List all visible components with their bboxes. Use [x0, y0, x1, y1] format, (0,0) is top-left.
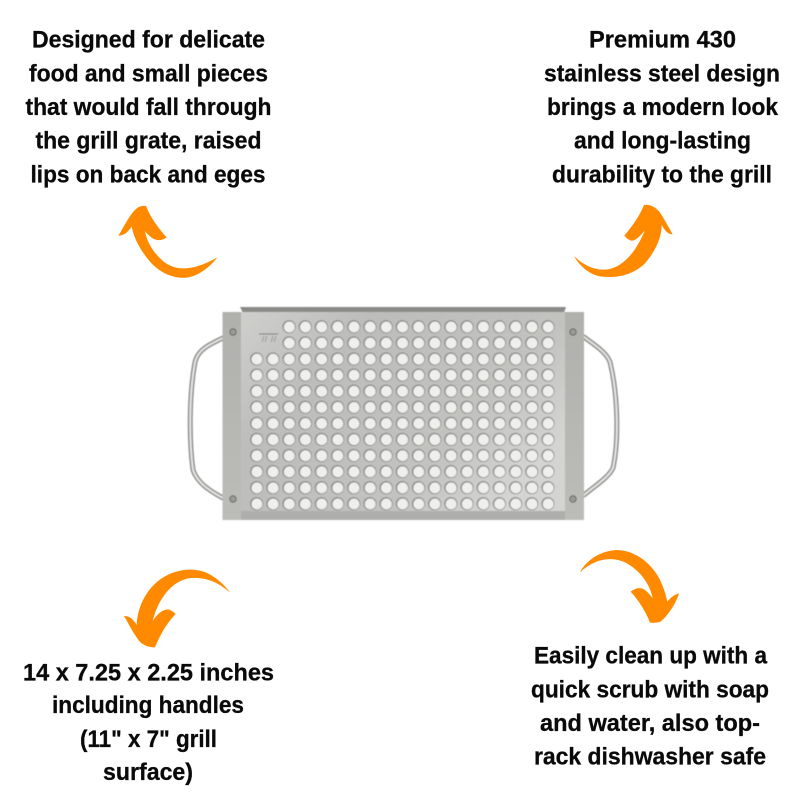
- text: bottom-right cleaning: and water, also top-: [540, 710, 760, 737]
- front edge band: [241, 511, 565, 520]
- product: stainless steel grill topper: [190, 307, 617, 520]
- text: top-right feature: Premium 430: [589, 26, 736, 54]
- text: top-left feature: that would fall through: [26, 94, 272, 121]
- text: bottom-right cleaning: quick scrub with soap: [531, 676, 769, 704]
- main plate: [241, 312, 565, 520]
- left flange: [222, 312, 241, 520]
- text: top-left feature: the grill grate, raised: [36, 128, 262, 154]
- text: bottom-left dimensions: [23, 660, 274, 786]
- left handle: [190, 338, 223, 498]
- text: top-left feature: food and small pieces: [29, 60, 268, 88]
- perforated holes, lower rows: [249, 351, 556, 512]
- arrow: bottom-right, pointing down: [580, 550, 679, 623]
- rivet: bottom-right: [570, 496, 576, 502]
- text: top-right feature: and long-lasting: [574, 128, 751, 154]
- text: bottom-left dimensions: (11" x 7" grill: [80, 726, 217, 753]
- text: top-right feature: [544, 26, 780, 188]
- top lip: [240, 307, 566, 313]
- right handle: [584, 337, 617, 495]
- arrow: bottom-left, pointing down: [124, 570, 230, 647]
- arrow: top-left, pointing up: [118, 206, 217, 278]
- text: top-left feature: lips on back and eges: [30, 162, 266, 188]
- text: top-left feature: [26, 26, 272, 188]
- text: bottom-left dimensions: surface): [103, 759, 193, 786]
- rivet: top-right: [570, 329, 576, 335]
- logo mark: [259, 334, 278, 342]
- text: bottom-right cleaning: Easily clean up with a: [534, 642, 768, 670]
- text: bottom-right cleaning: rack dishwasher safe: [534, 744, 766, 770]
- text: bottom-left dimensions: including handles: [52, 692, 244, 719]
- text: top-right feature: durability to the grill: [552, 162, 772, 188]
- perforated holes, top rows beside logo: [281, 319, 556, 351]
- text: top-left feature: Designed for delicate: [32, 26, 265, 54]
- text: top-right feature: brings a modern look: [547, 94, 779, 121]
- text: top-right feature: stainless steel design: [544, 60, 780, 88]
- rivet: bottom-left: [230, 496, 236, 502]
- right flange: [565, 312, 584, 520]
- text: bottom-left dimensions: 14 x 7.25 x 2.25 inches: [23, 660, 274, 686]
- rivet: top-left: [230, 329, 236, 335]
- arrow: top-right, pointing up: [574, 205, 673, 277]
- text: bottom-right cleaning: [531, 642, 769, 770]
